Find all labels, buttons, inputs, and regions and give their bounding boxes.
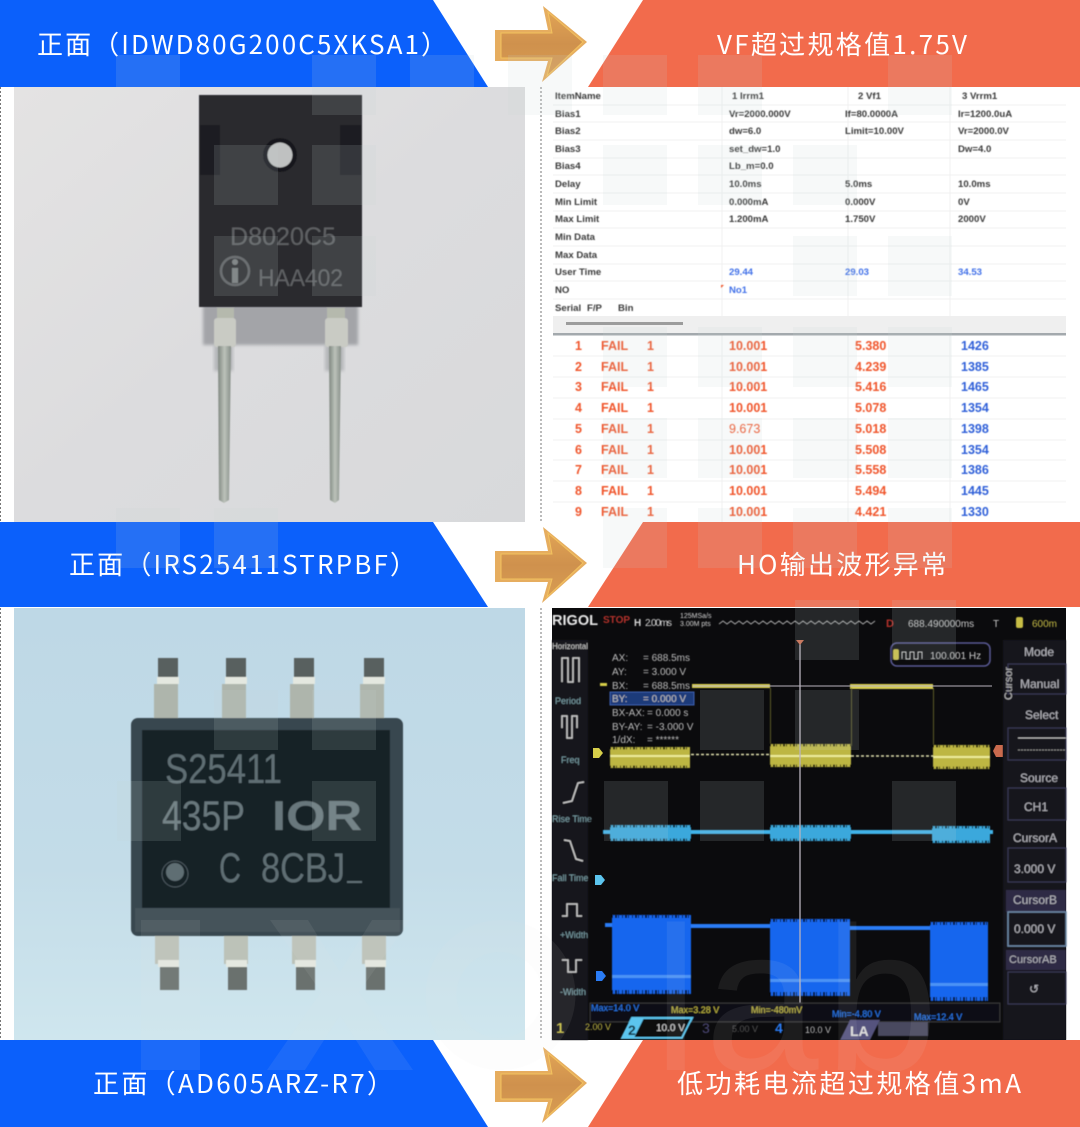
- fail rows: FAIL: [601, 401, 628, 415]
- photo: TO-247 diode: HAA402: [258, 265, 343, 292]
- measurement strip and channel scales: 2.00 V: [585, 1022, 611, 1032]
- scope right menu: CursorB: [1013, 893, 1057, 907]
- cursor readout: = ******: [647, 735, 679, 746]
- header row 1: finding: VF超过规格值1.75V: [717, 25, 967, 62]
- frequency counter: [891, 643, 990, 666]
- top pins: [154, 658, 385, 718]
- cursor lines: [693, 640, 992, 1018]
- parameter rows: Max Limit: [555, 214, 600, 225]
- parameter rows: 29.03: [845, 267, 869, 278]
- measurement strip and channel scales: 1: [556, 1020, 564, 1037]
- fail rows: 9: [575, 505, 582, 519]
- parameter rows: 10.0ms: [958, 179, 991, 190]
- parameter rows: Max Data: [555, 250, 598, 261]
- fail rows: 1: [647, 339, 654, 353]
- measurement strip and channel scales: 5.00 V: [732, 1024, 758, 1034]
- scope right menu: [1003, 640, 1066, 1040]
- fail rows: FAIL: [601, 339, 628, 353]
- parameter rows: dw=6.0: [729, 126, 761, 137]
- parameter rows: 1.750V: [845, 214, 876, 225]
- fail rows: 8: [575, 484, 582, 498]
- marking: D8020C5: [230, 223, 336, 251]
- cursor readout: = 0.000 V: [643, 694, 686, 705]
- fail rows: 1385: [961, 360, 989, 374]
- arrow 2: [495, 527, 587, 603]
- parameter rows: 0.000V: [845, 197, 876, 208]
- scope top bar: 2.00ms: [645, 618, 672, 629]
- fail rows: 10.001: [729, 443, 767, 457]
- fail rows: 3: [575, 380, 582, 394]
- waveform channel 2 (cyan): [603, 825, 993, 843]
- scope top bar: D: [886, 618, 894, 630]
- scope left menu: -Width: [560, 987, 586, 997]
- parameter rows: 5.0ms: [845, 179, 872, 190]
- scope right menu: Select: [1025, 708, 1059, 722]
- measurement strip and channel scales: 10.0 V: [805, 1025, 831, 1035]
- parameter rows: NO: [555, 285, 570, 296]
- scope right menu: Source: [1020, 771, 1058, 785]
- scope left menu: Rise Time: [552, 814, 592, 824]
- chip marking: S25411: [165, 745, 282, 792]
- cursor readout: AX:: [612, 653, 628, 664]
- photo: SOIC-8 chip: C: [219, 844, 241, 891]
- parameter rows: 0V: [958, 197, 970, 208]
- fail rows: 4.239: [855, 360, 886, 374]
- scope right menu: CursorAB: [1009, 954, 1057, 966]
- parameter rows: F/P: [587, 303, 603, 314]
- chip body: [131, 718, 403, 936]
- parameter rows: [555, 91, 1012, 314]
- scope left menu: Horizontal: [552, 642, 588, 651]
- photo: SOIC-8 chip: [0, 608, 525, 1040]
- parameter rows: set_dw=1.0: [729, 144, 780, 155]
- fail rows: 5.416: [855, 380, 886, 394]
- parameter rows: Bias2: [555, 126, 581, 137]
- fail rows: 10.001: [729, 484, 767, 498]
- fail rows: 10.001: [729, 360, 767, 374]
- header row 1: finding: [588, 0, 1080, 87]
- parameter rows: Bias1: [555, 109, 581, 120]
- cursor readout: AY:: [612, 667, 627, 678]
- bottom pins: [155, 930, 386, 990]
- fail rows: 7: [575, 463, 582, 477]
- parameter rows: Dw=4.0: [958, 144, 991, 155]
- measurement strip and channel scales: 10.0 V: [656, 1023, 685, 1034]
- scope left menu: Fall Time: [552, 873, 589, 883]
- header row 2: part number: 正面（IRS25411STRPBF）: [69, 545, 416, 582]
- fail rows: 1354: [961, 401, 989, 415]
- measurement strip and channel scales: 4: [775, 1020, 783, 1036]
- fail rows: 10.001: [729, 380, 767, 394]
- waveform channel 3 (blue): [605, 915, 988, 1001]
- watermark squares: [116, 55, 956, 841]
- scope top bar: RIGOL: [552, 612, 598, 629]
- fail rows: 1: [647, 380, 654, 394]
- fail rows: FAIL: [601, 505, 628, 519]
- photo: TO-247 diode: [0, 87, 525, 522]
- scope top bar: STOP: [603, 615, 630, 626]
- fail rows: 5.078: [855, 401, 886, 415]
- fail rows: 1398: [961, 422, 989, 436]
- cursor readout: BX:: [612, 681, 628, 692]
- fail rows: 1: [647, 484, 654, 498]
- scope top bar: H: [634, 618, 641, 629]
- header row 3: part number: [0, 1040, 488, 1127]
- cursor readout: = 688.5ms: [643, 653, 690, 664]
- parameter rows: 1.200mA: [729, 214, 769, 225]
- scope right menu: 0.000 V: [1014, 922, 1055, 936]
- header row 3: finding: 低功耗电流超过规格值3mA: [677, 1064, 1021, 1101]
- fail rows: 10.001: [729, 505, 767, 519]
- scope left menu: Freq: [561, 755, 580, 765]
- right lead: [325, 308, 348, 503]
- measurement strip and channel scales: Min=-4.80 V: [832, 1009, 881, 1019]
- fail rows: FAIL: [601, 380, 628, 394]
- scope top bar: 125MSa/s: [680, 613, 712, 620]
- parameter rows: 0.000mA: [729, 197, 769, 208]
- parameter rows: 2000V: [958, 214, 986, 225]
- fail rows: 1354: [961, 443, 989, 457]
- parameter rows: Min Data: [555, 232, 596, 243]
- fail rows: 1: [647, 443, 654, 457]
- header row 1: part number: 正面（IDWD80G200C5XKSA1）: [37, 25, 447, 62]
- fail rows: 4: [575, 401, 582, 415]
- parameter rows: Bias4: [555, 161, 581, 172]
- header row 3: finding: [588, 1040, 1080, 1127]
- scope top bar: 3.00M pts: [680, 621, 711, 628]
- parameter rows: Ir=1200.0uA: [958, 109, 1012, 120]
- scope right menu: Manual: [1020, 677, 1059, 691]
- fail rows: 1: [647, 463, 654, 477]
- cursor readout: = -3.000 V: [647, 722, 694, 733]
- fail rows: [575, 339, 989, 519]
- header row 2: part number: [0, 522, 488, 607]
- fail rows: 9.673: [729, 422, 760, 436]
- measurement strip and channel scales: Min=-480mV: [751, 1005, 802, 1015]
- parameter rows: 34.53: [958, 267, 982, 278]
- left lead: [214, 308, 236, 503]
- scope top bar: 600m: [1032, 619, 1057, 630]
- channel markers: [593, 745, 1003, 981]
- fail rows: FAIL: [601, 463, 628, 477]
- parameter rows: Vr=2000.0V: [958, 126, 1010, 137]
- parameter rows: If=80.0000A: [845, 109, 898, 120]
- scope left menu: [552, 640, 592, 1040]
- scope top bar: [552, 612, 1057, 630]
- photo: SOIC-8 chip: 8CBJ: [261, 844, 345, 891]
- measurement strip and channel scales: Max=12.4 V: [914, 1012, 962, 1022]
- scope right menu: CursorA: [1013, 831, 1057, 845]
- parameter rows: 29.44: [729, 267, 754, 278]
- cursor readout: BY:: [612, 694, 628, 705]
- cursor readout: BX-AX:: [612, 708, 645, 719]
- frequency counter: 100.001 Hz: [930, 651, 981, 662]
- scope right menu: Mode: [1024, 645, 1054, 659]
- fail rows: 10.001: [729, 339, 767, 353]
- fail rows: 5.380: [855, 339, 886, 353]
- fail rows: 5.558: [855, 463, 886, 477]
- fail rows: 4.421: [855, 505, 886, 519]
- cursor readout: = 0.000 s: [647, 708, 688, 719]
- header row 1: part number: [0, 0, 488, 87]
- table header band and scrollbar: [553, 316, 1066, 336]
- parameter rows: Lb_m=0.0: [729, 161, 774, 172]
- fail rows: 10.001: [729, 463, 767, 477]
- tab shadow: [203, 305, 358, 345]
- scope right menu: CH1: [1024, 800, 1048, 814]
- fail rows: 1: [575, 339, 582, 353]
- fail rows: 1465: [961, 380, 989, 394]
- fail rows: 10.001: [729, 401, 767, 415]
- arrow 1: [495, 6, 587, 82]
- parameter rows: 10.0ms: [729, 179, 762, 190]
- panel: oscilloscope screen: [541, 608, 1066, 1040]
- cursor readout: 1/dX:: [612, 735, 635, 746]
- fail rows: 1: [647, 505, 654, 519]
- scope right menu: 3.000 V: [1014, 862, 1055, 876]
- fail rows: 1445: [961, 484, 989, 498]
- parameter rows: ItemName: [555, 91, 601, 102]
- fail rows: 1386: [961, 463, 989, 477]
- arrow 3: [495, 1047, 587, 1123]
- fail rows: 5.494: [855, 484, 886, 498]
- scope left menu: Period: [555, 696, 581, 706]
- fail rows: 1: [647, 360, 654, 374]
- fail rows: 1426: [961, 339, 989, 353]
- parameter rows: User Time: [555, 267, 601, 278]
- measurement strip and channel scales: Max=3.28 V: [671, 1005, 719, 1015]
- measurement strip and channel scales: LA: [850, 1023, 869, 1039]
- parameter rows: No1: [729, 285, 748, 296]
- scope left menu: +Width: [560, 930, 588, 940]
- parameter rows: 3 Vrrm1: [962, 91, 998, 102]
- fail rows: 1330: [961, 505, 989, 519]
- photo: SOIC-8 chip: IOR: [272, 792, 362, 839]
- photo: SOIC-8 chip: 435P: [162, 792, 245, 839]
- header row 2: finding: [588, 522, 1080, 607]
- watermark lettering: lab: [653, 885, 945, 1114]
- measurement strip and channel scales: [556, 1003, 1000, 1040]
- measurement strip and channel scales: Max=14.0 V: [591, 1003, 639, 1013]
- parameter rows: Delay: [555, 179, 581, 190]
- fail rows: 1: [647, 422, 654, 436]
- parameter rows: Limit=10.00V: [845, 126, 905, 137]
- fail rows: FAIL: [601, 484, 628, 498]
- fail rows: 5.508: [855, 443, 886, 457]
- waveform channel 1 (yellow): [610, 684, 990, 769]
- header row 3: part number: 正面（AD605ARZ-R7）: [93, 1064, 393, 1101]
- fail rows: FAIL: [601, 422, 628, 436]
- parameter rows: Vr=2000.000V: [729, 109, 791, 120]
- parameter rows: 1 Irrm1: [732, 91, 765, 102]
- cursor readout: BY-AY:: [612, 722, 643, 733]
- measurement strip and channel scales: 2: [628, 1022, 636, 1038]
- fail rows: 5: [575, 422, 582, 436]
- scope right menu: ↺: [1029, 982, 1039, 996]
- parameter rows: Serial: [555, 303, 581, 314]
- fail rows: FAIL: [601, 443, 628, 457]
- scope top bar: 688.490000ms: [908, 619, 974, 630]
- package body: [199, 95, 362, 307]
- panel: test result table: [541, 87, 1066, 522]
- cursor readout: [600, 653, 694, 746]
- fail rows: 1: [647, 401, 654, 415]
- parameter rows: Bin: [618, 303, 634, 314]
- infineon logo: [221, 257, 249, 285]
- parameter rows: 2 Vf1: [858, 91, 882, 102]
- fail rows: 5.018: [855, 422, 886, 436]
- fail rows: 6: [575, 443, 582, 457]
- fail rows: 2: [575, 360, 582, 374]
- watermark lettering: [141, 885, 945, 1114]
- header row 2: finding: HO输出波形异常: [737, 545, 947, 582]
- cursor readout: = 3.000 V: [643, 667, 686, 678]
- scope top bar: T: [993, 619, 999, 630]
- cursor readout: = 688.5ms: [643, 681, 690, 692]
- parameter rows: Bias3: [555, 144, 581, 155]
- parameter rows: Min Limit: [555, 197, 598, 208]
- measurement strip and channel scales: 3: [702, 1020, 710, 1036]
- scope right menu: Cursor: [1003, 667, 1015, 700]
- fail rows: FAIL: [601, 360, 628, 374]
